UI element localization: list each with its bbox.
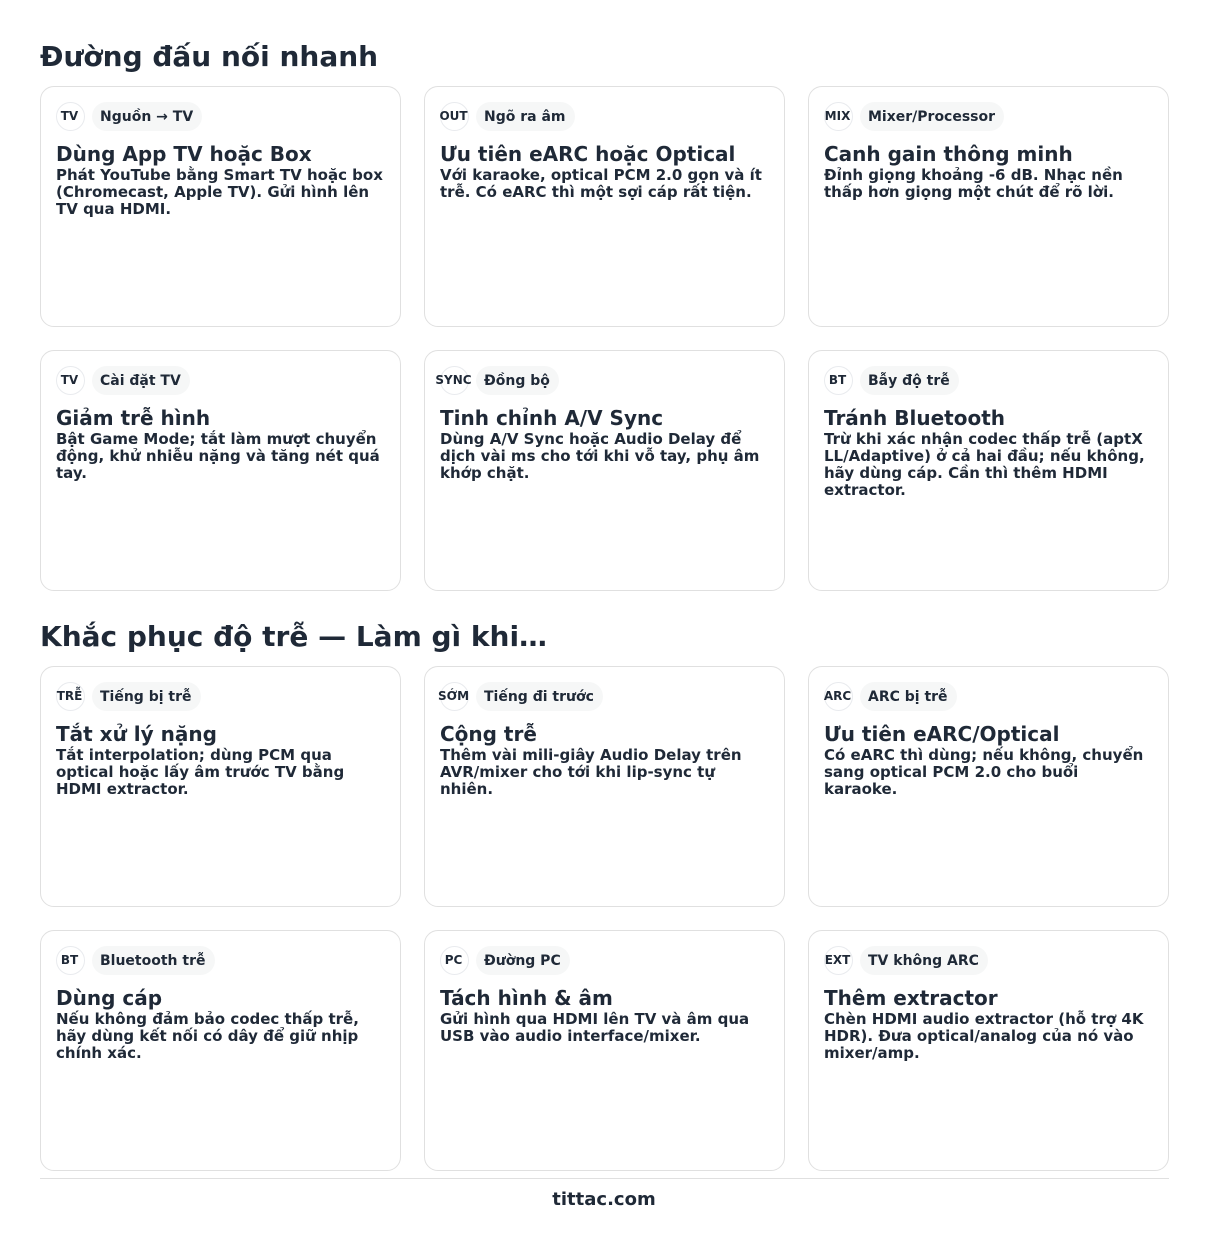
card: early audio: Cộng trễ (440, 722, 537, 746)
card: TV without ARC (808, 930, 1169, 1171)
card: TV app or box (40, 86, 401, 327)
card: early audio: Tiếng đi trước (484, 689, 594, 705)
card: Bluetooth latency: Nếu không đảm bảo codec thấp trễ, hãy dùng kết nối có dây để giữ nhịp chính xác. (56, 1010, 359, 1062)
card: TV app or box: TV (61, 108, 78, 122)
card: late audio: TRỄ (57, 688, 82, 702)
card: Bluetooth latency: Bluetooth trễ (100, 953, 206, 969)
card: gain (808, 86, 1169, 327)
card: ARC latency: ARC bị trễ (868, 689, 948, 705)
card: avoid Bluetooth: Trừ khi xác nhận codec thấp trễ (aptX LL/Adaptive) ở cả hai đầu; nếu không, hãy dùng cáp. Cần thì thêm HDMI extractor. (824, 430, 1145, 499)
card: TV without ARC: Chèn HDMI audio extractor (hỗ trợ 4K HDR). Đưa optical/analog của nó vào mixer/amp. (824, 1010, 1143, 1062)
card: late audio (40, 666, 401, 907)
card: ARC latency: ARC (824, 688, 851, 702)
heading: latency fixes: Khắc phục độ trễ — Làm gì khi… (40, 620, 547, 653)
card: TV without ARC: Thêm extractor (824, 986, 998, 1010)
card: gain: Đỉnh giọng khoảng -6 dB. Nhạc nền thấp hơn giọng một chút để rõ lời. (824, 166, 1123, 201)
card: PC path: PC (445, 952, 462, 966)
card: early audio (424, 666, 785, 907)
card: TV settings (40, 350, 401, 591)
card: avoid Bluetooth: BT (829, 372, 846, 386)
card: audio output (424, 86, 785, 327)
card: PC path: Đường PC (484, 953, 561, 969)
card: audio output: OUT (439, 108, 468, 122)
card: A/V sync: Đồng bộ (484, 373, 550, 389)
card: A/V sync: Tinh chỉnh A/V Sync (440, 406, 663, 430)
card: audio output: Với karaoke, optical PCM 2.0 gọn và ít trễ. Có eARC thì một sợi cáp rất tiện. (440, 166, 762, 201)
card: TV without ARC: EXT (825, 952, 850, 966)
card: gain: MIX (825, 108, 850, 122)
card: audio output: Ưu tiên eARC hoặc Optical (440, 142, 735, 166)
card: Bluetooth latency: Dùng cáp (56, 986, 162, 1010)
card: audio output: Ngõ ra âm (484, 109, 566, 125)
card: TV settings: Cài đặt TV (100, 373, 181, 389)
card: gain: Mixer/Processor (868, 109, 995, 125)
card: Bluetooth latency (40, 930, 401, 1171)
card: PC path: Tách hình & âm (440, 986, 613, 1010)
card: late audio: Tắt interpolation; dùng PCM qua optical hoặc lấy âm trước TV bằng HDMI extractor. (56, 746, 344, 798)
card: late audio: Tắt xử lý nặng (56, 722, 217, 746)
card: TV settings: TV (61, 372, 78, 386)
card: TV app or box: Dùng App TV hoặc Box (56, 142, 312, 166)
card: TV app or box: Nguồn → TV (100, 109, 193, 125)
card: A/V sync: SYNC (435, 372, 472, 386)
card: TV settings: Giảm trễ hình (56, 406, 210, 430)
card: A/V sync (424, 350, 785, 591)
card: late audio: Tiếng bị trễ (100, 689, 192, 705)
card: ARC latency: Có eARC thì dùng; nếu không, chuyển sang optical PCM 2.0 cho buổi karaoke. (824, 746, 1143, 798)
card: avoid Bluetooth (808, 350, 1169, 591)
card: avoid Bluetooth: Bẫy độ trễ (868, 373, 950, 389)
footer: site name: tittac.com (552, 1189, 656, 1210)
card: PC path (424, 930, 785, 1171)
card: A/V sync: Dùng A/V Sync hoặc Audio Delay để dịch vài ms cho tới khi vỗ tay, phụ âm khớp chặt. (440, 430, 759, 482)
card: early audio: Thêm vài mili-giây Audio Delay trên AVR/mixer cho tới khi lip-sync tự nhiên. (440, 746, 742, 798)
card: Bluetooth latency: BT (61, 952, 78, 966)
card: TV app or box: Phát YouTube bằng Smart TV hoặc box (Chromecast, Apple TV). Gửi hình lên TV qua HDMI. (56, 166, 383, 218)
card: gain: Canh gain thông minh (824, 142, 1073, 166)
card: PC path: Gửi hình qua HDMI lên TV và âm qua USB vào audio interface/mixer. (440, 1010, 749, 1045)
card: ARC latency: Ưu tiên eARC/Optical (824, 722, 1059, 746)
card: ARC latency (808, 666, 1169, 907)
card: avoid Bluetooth: Tránh Bluetooth (824, 406, 1005, 430)
heading: quick connection path: Đường đấu nối nhanh (40, 40, 378, 73)
card: early audio: SỚM (438, 688, 469, 702)
card: TV settings: Bật Game Mode; tắt làm mượt chuyển động, khử nhiễu nặng và tăng nét quá tay. (56, 430, 380, 482)
card: TV without ARC: TV không ARC (868, 953, 979, 969)
